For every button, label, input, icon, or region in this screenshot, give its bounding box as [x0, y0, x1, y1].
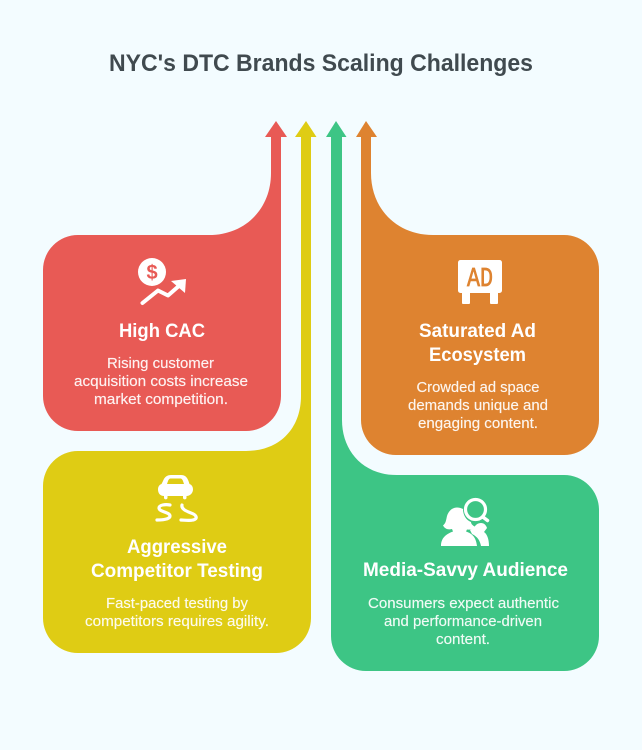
text: Aggressive Competitor Testing description: competitors requires agility. — [85, 614, 269, 630]
text: Media-Savvy Audience description — [368, 596, 559, 648]
panel: High CAC — [43, 121, 287, 431]
icon: rising cost coin: $ — [146, 262, 158, 284]
card and arrow: Saturated Ad Ecosystem — [356, 121, 599, 455]
card and arrow: Media-Savvy Audience — [326, 121, 599, 671]
text: Saturated Ad Ecosystem description: engaging content. — [418, 416, 538, 432]
icon: skidding car — [157, 475, 196, 520]
text: Saturated Ad Ecosystem description: Crowded ad space — [416, 380, 540, 396]
heading: Saturated Ad Ecosystem — [419, 321, 536, 366]
heading: Saturated Ad Ecosystem: Ecosystem — [429, 345, 526, 366]
heading: Aggressive Competitor Testing: Aggressive — [127, 537, 227, 558]
panel: Aggressive Competitor Testing — [43, 121, 316, 653]
text: Media-Savvy Audience description: Consumers expect authentic — [368, 596, 559, 612]
icon: ad billboard — [458, 260, 502, 304]
text: Saturated Ad Ecosystem description — [408, 380, 548, 432]
heading: Media-Savvy Audience: Media-Savvy Audience — [363, 560, 568, 581]
card and arrow: High CAC — [43, 121, 287, 431]
heading: High CAC: High CAC — [119, 321, 205, 342]
heading: Saturated Ad Ecosystem: Saturated Ad — [419, 321, 536, 342]
card and arrow: Aggressive Competitor Testing — [43, 121, 316, 653]
text: Media-Savvy Audience description: and performance-driven — [384, 614, 542, 630]
text: High CAC description: acquisition costs increase — [74, 374, 248, 390]
icon: ad billboard: AD — [467, 265, 493, 295]
panel: Media-Savvy Audience — [326, 121, 599, 671]
text: High CAC description — [74, 356, 248, 408]
heading: Aggressive Competitor Testing: Competitor Testing — [91, 561, 263, 582]
text: Media-Savvy Audience description: content. — [436, 632, 490, 648]
text: Aggressive Competitor Testing description — [85, 596, 269, 630]
icon: rising cost coin — [138, 258, 186, 303]
text: High CAC description: Rising customer — [107, 356, 214, 372]
title: NYC's DTC Brands Scaling Challenges — [109, 50, 533, 77]
text: High CAC description: market competition. — [94, 392, 228, 408]
icon: audience with magnifier — [441, 500, 489, 546]
heading: Aggressive Competitor Testing — [91, 537, 263, 582]
text: Saturated Ad Ecosystem description: demands unique and — [408, 398, 548, 414]
panel: Saturated Ad Ecosystem — [356, 121, 599, 455]
text: Aggressive Competitor Testing description: Fast-paced testing by — [106, 596, 249, 612]
